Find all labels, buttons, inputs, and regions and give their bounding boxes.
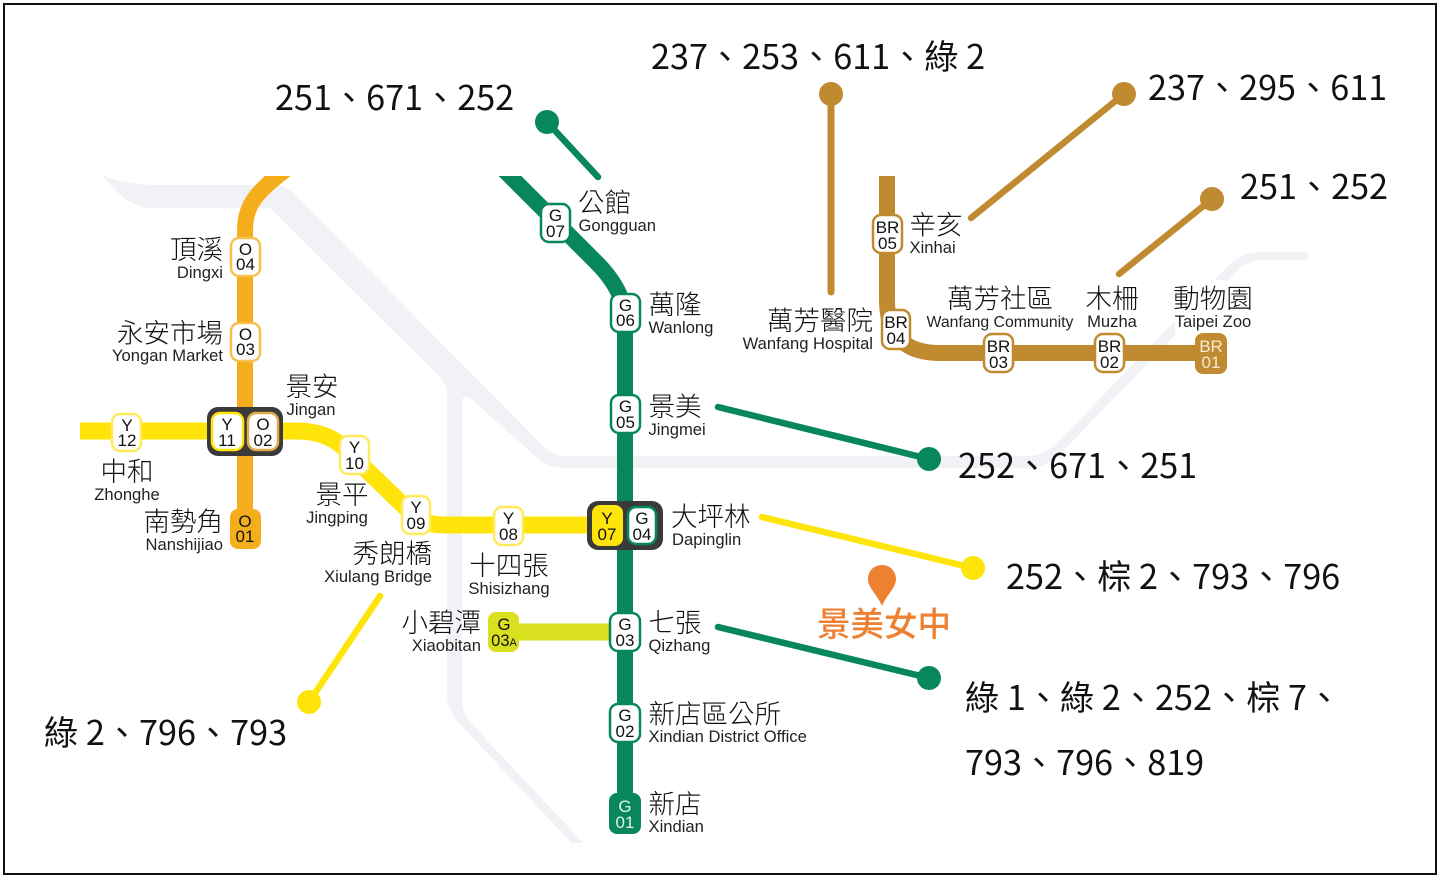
station: G06 Wanlong: Wanlong (648, 318, 713, 337)
station: BR02 Muzha (1086, 277, 1138, 372)
station: G07 Gongguan (541, 181, 656, 242)
station: Y09 Xiulang Bridge: 09 (407, 514, 425, 533)
station: G01 Xindian: 新店 (648, 782, 702, 822)
station: Y08 Shisizhang: 08 (499, 525, 518, 544)
station: Y09 Xiulang Bridge: Y (410, 498, 422, 517)
pointer: Gongguan buses (535, 110, 598, 177)
station: G01 Xindian: G (618, 797, 632, 816)
station: Y11 / O02 Jingan interchange: Y (221, 415, 233, 434)
station: BR03 Wanfang Community: 萬芳社區 (947, 277, 1053, 316)
station: Y11 / O02 Jingan interchange: O (256, 415, 270, 434)
line: brown (887, 170, 1212, 353)
bus routes: Wanfang Hospital: 237、253、611、綠 2 (651, 29, 985, 79)
station: G01 Xindian (609, 782, 704, 836)
station: O04 Dingxi: 頂溪 (170, 228, 223, 267)
station: Y10 Jingping: Jingping (306, 508, 368, 527)
pointer: Qizhang buses (718, 627, 941, 690)
station: G03 Qizhang (610, 601, 710, 655)
station: G02 Xindian District Office: G (618, 706, 632, 725)
station: G05 Jingmei: 景美 (648, 385, 702, 424)
station: BR05 Xinhai: BR (876, 218, 899, 237)
station: Y12 Zhonghe: Zhonghe (94, 485, 160, 504)
station: O03 Yongan Market: O (239, 325, 252, 344)
station: O03 Yongan Market (112, 312, 260, 365)
station: BR05 Xinhai (873, 204, 962, 257)
station: BR01 Taipei Zoo: BR (1199, 337, 1223, 356)
station: G03A Xiaobitan: 小碧潭 (402, 601, 481, 640)
pointer: Dapinglin buses (762, 517, 985, 580)
station: BR01 Taipei Zoo: 01 (1202, 353, 1220, 372)
station: O04 Dingxi (170, 228, 260, 282)
bus routes: Xiulang Bridge: 綠 2、796、793 (44, 705, 287, 755)
station: O03 Yongan Market: Yongan Market (112, 346, 223, 365)
station: BR02 Muzha: BR (1098, 337, 1121, 356)
station: G03 Qizhang: G (618, 615, 632, 634)
station: Y08 Shisizhang: Y (503, 509, 514, 528)
station: G02 Xindian District Office: Xindian District Office (648, 727, 807, 746)
station: BR03 Wanfang Community: Wanfang Community (927, 314, 1074, 331)
station: BR03 Wanfang Community: 03 (989, 353, 1008, 372)
station: BR03 Wanfang Community (927, 277, 1074, 372)
pointer: Muzha buses (1119, 187, 1224, 274)
station: BR02 Muzha: Muzha (1087, 312, 1138, 331)
bus routes: Qizhang: 793、796、819 (965, 735, 1204, 785)
station: G05 Jingmei: Jingmei (648, 420, 706, 439)
station: Y08 Shisizhang: 十四張 (469, 544, 549, 583)
station: BR04 Wanfang Hospital (743, 299, 910, 353)
station: O03 Yongan Market: 03 (236, 340, 255, 359)
bus routes: Qizhang (965, 670, 1341, 785)
station: BR04 Wanfang Hospital: 萬芳醫院 (767, 299, 873, 338)
station: G03A Xiaobitan: Xiaobitan (412, 636, 481, 655)
line: light green branch (519, 624, 609, 640)
station: Y08 Shisizhang: Shisizhang (468, 579, 550, 598)
station: Y10 Jingping: 10 (345, 454, 364, 473)
station: BR04 Wanfang Hospital: BR (884, 313, 908, 332)
station: Y09 Xiulang Bridge: 秀朗橋 (352, 532, 432, 571)
station: G07 Gongguan: G (549, 206, 562, 225)
bus routes: Xinhai: 237、295、611 (1148, 60, 1387, 110)
station: O01 Nanshijiao: Nanshijiao (146, 535, 223, 554)
station: Y07 / G04 Dapinglin interchange: Y (601, 509, 613, 528)
station: G05 Jingmei: 05 (616, 413, 635, 432)
station: G03 Qizhang: 七張 (648, 601, 702, 640)
station: Y07 / G04 Dapinglin interchange: 大坪林 (671, 495, 750, 534)
bus routes: Jingmei: 252、671、251 (958, 438, 1197, 488)
pointer: Wanfang Hospital buses (819, 82, 843, 292)
background: white label patch (1175, 280, 1252, 378)
station: Y07 / G04 Dapinglin interchange: G (635, 509, 649, 528)
station: G06 Wanlong (611, 283, 713, 337)
bus routes: Qizhang: 綠 1、綠 2、252、棕 7、 (965, 670, 1341, 720)
icon: location pin (868, 565, 896, 606)
station: G02 Xindian District Office: 02 (616, 722, 634, 741)
station: Y11 / O02 Jingan interchange (207, 365, 338, 456)
station: Y12 Zhonghe (94, 414, 160, 504)
station: BR04 Wanfang Hospital: 04 (887, 329, 905, 348)
station: O01 Nanshijiao: O (238, 512, 252, 531)
station: O04 Dingxi: O (239, 240, 252, 259)
lines group (80, 165, 1212, 820)
bus routes: Muzha: 251、252 (1240, 159, 1388, 209)
station: Y12 Zhonghe: 中和 (100, 450, 154, 489)
station: G03 Qizhang: Qizhang (648, 636, 710, 655)
station: G06 Wanlong: 06 (616, 311, 635, 330)
station: Y12 Zhonghe: 12 (118, 431, 136, 450)
station: Y07 / G04 Dapinglin interchange: 07 (598, 525, 616, 544)
station: Y10 Jingping: Y (349, 438, 360, 457)
pointer: Xiulang Bridge buses (297, 596, 380, 714)
station: O04 Dingxi: Dingxi (177, 263, 223, 282)
station: BR02 Muzha: 02 (1100, 353, 1119, 372)
station: Y09 Xiulang Bridge: Xiulang Bridge (324, 567, 432, 586)
station: O03 Yongan Market: 永安市場 (117, 312, 223, 350)
station: Y12 Zhonghe: Y (121, 416, 133, 435)
station: G03 Qizhang: 03 (616, 631, 634, 650)
station: O01 Nanshijiao (144, 500, 261, 554)
destination label: 景美女中 (817, 597, 951, 646)
station: G05 Jingmei (611, 385, 706, 439)
station: G07 Gongguan: Gongguan (578, 216, 656, 235)
line: yellow (80, 431, 610, 525)
station: BR01 Taipei Zoo (1173, 277, 1253, 374)
station: BR05 Xinhai: 05 (878, 234, 897, 253)
station: Y08 Shisizhang (468, 507, 550, 598)
station: G07 Gongguan: 07 (546, 222, 565, 241)
station: BR04 Wanfang Hospital: Wanfang Hospital (743, 334, 873, 353)
station: Y10 Jingping (306, 436, 369, 527)
station: Y09 Xiulang Bridge (324, 496, 432, 586)
station: G06 Wanlong: 萬隆 (648, 283, 702, 322)
line: orange (245, 165, 292, 535)
station: G03A Xiaobitan (402, 601, 519, 655)
station: Y11 / O02 Jingan interchange: Jingan (287, 400, 335, 419)
station: BR03 Wanfang Community: BR (987, 337, 1010, 356)
station: Y07 / G04 Dapinglin interchange: 04 (633, 525, 651, 544)
station: O01 Nanshijiao: 南勢角 (144, 500, 223, 539)
background: faded map lines (103, 176, 1308, 850)
station: BR02 Muzha: 木柵 (1086, 277, 1138, 316)
station: G01 Xindian: 01 (616, 813, 634, 832)
station: G02 Xindian District Office (610, 692, 807, 746)
bus routes: Dapinglin: 252、棕 2、793、796 (1006, 549, 1340, 599)
station: O01 Nanshijiao: 01 (236, 527, 254, 546)
station: Y07 / G04 Dapinglin interchange (587, 495, 750, 550)
station: BR01 Taipei Zoo: 動物園 (1173, 277, 1253, 316)
station: Y11 / O02 Jingan interchange: 02 (254, 431, 272, 450)
station: G05 Jingmei: G (619, 397, 632, 416)
station: G03A Xiaobitan: G (497, 615, 511, 634)
station: BR05 Xinhai: Xinhai (910, 238, 956, 257)
station: G02 Xindian District Office: 新店區公所 (648, 692, 781, 732)
station: G01 Xindian: Xindian (648, 817, 704, 836)
station: G07 Gongguan: 公館 (578, 181, 631, 220)
station: O04 Dingxi: 04 (236, 255, 255, 274)
station: Y10 Jingping: 景平 (316, 473, 368, 512)
station: BR05 Xinhai: 辛亥 (910, 204, 962, 242)
station: Y11 / O02 Jingan interchange: 景安 (286, 365, 338, 404)
pointer: Jingmei buses (718, 407, 941, 471)
line: green (500, 166, 625, 820)
station: BR01 Taipei Zoo: Taipei Zoo (1175, 312, 1251, 331)
station: Y07 / G04 Dapinglin interchange: Dapinglin (672, 530, 741, 549)
station: Y11 / O02 Jingan interchange: 11 (218, 431, 236, 450)
station: G06 Wanlong: G (619, 296, 632, 315)
station: G03A Xiaobitan: 03A (491, 632, 518, 650)
bus routes: Gongguan: 251、671、252 (275, 70, 514, 120)
pointer: Xinhai buses (971, 82, 1136, 218)
